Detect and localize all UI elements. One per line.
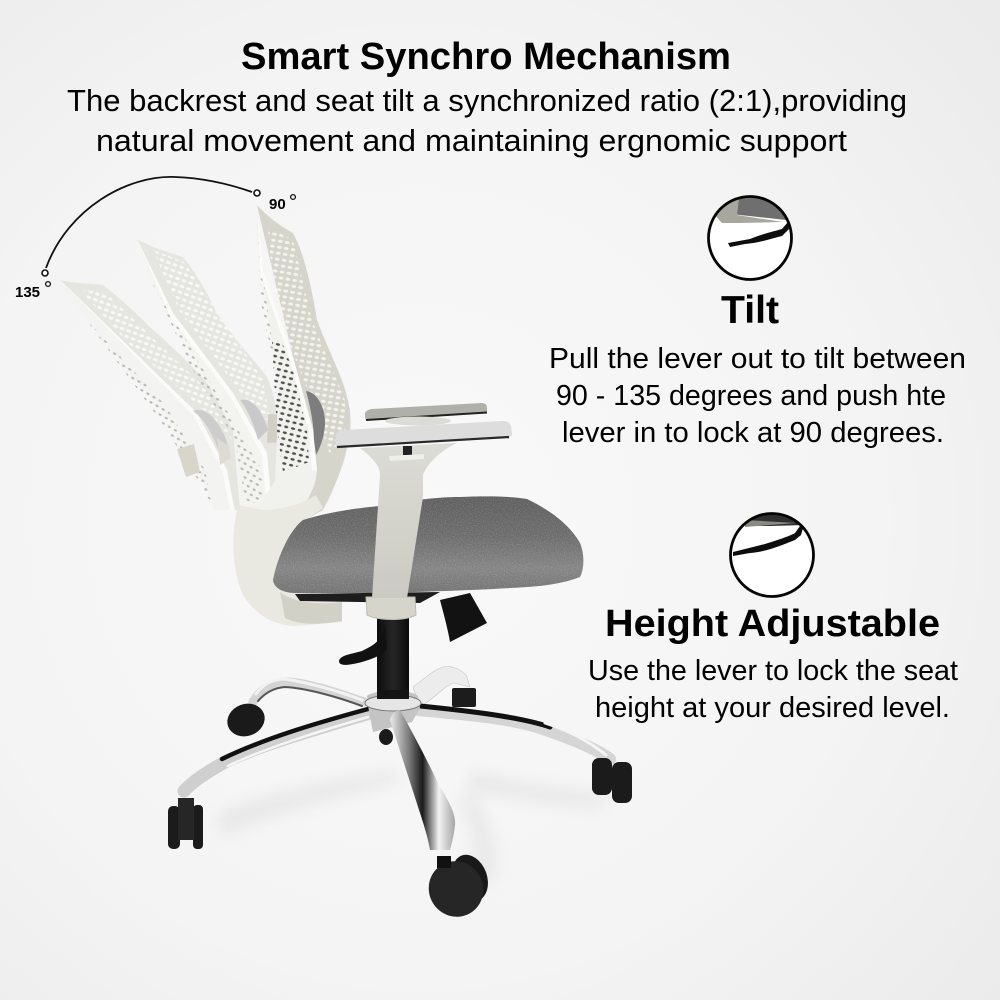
chair <box>60 205 632 927</box>
seat <box>273 496 583 593</box>
armrest front <box>336 421 512 598</box>
knob 135 <box>177 444 200 477</box>
rear-right leg <box>413 667 470 707</box>
rear-right caster <box>452 688 476 707</box>
icon: tilt lever <box>707 195 793 281</box>
backrest: 135 degree position <box>60 280 262 510</box>
knob mid <box>267 414 283 443</box>
description <box>67 83 907 158</box>
height adjustable description <box>588 655 958 724</box>
left leg <box>184 709 370 791</box>
description: natural movement and maintaining ergnomic support <box>96 123 847 158</box>
label: 135 degrees: 135 <box>15 284 40 301</box>
icon: height lever <box>730 510 814 597</box>
heading: height adjustable: Height Adjustable <box>605 603 940 645</box>
title: Smart Synchro Mechanism <box>241 36 731 78</box>
backrest: mid position <box>137 239 284 510</box>
rear-left caster <box>223 698 269 742</box>
label: 135 degrees <box>15 282 50 301</box>
chrome base <box>168 667 632 927</box>
tilt description: lever in to lock at 90 degrees. <box>562 417 944 449</box>
label: 90 degrees: 90 <box>269 196 286 213</box>
tension knob <box>440 593 487 642</box>
left caster <box>168 798 203 849</box>
lumbar pad mid <box>240 400 268 440</box>
lumbar pad 135 <box>193 410 230 462</box>
height adjustable description: Use the lever to lock the seat <box>588 655 958 687</box>
backrest: upright frame and mesh <box>240 205 351 523</box>
right caster <box>592 758 632 803</box>
front leg <box>390 710 455 850</box>
description: The backrest and seat tilt a synchronized ratio (2:1),providing <box>67 83 907 118</box>
lumbar pad upright <box>306 391 325 455</box>
right leg <box>418 706 610 759</box>
tilt description: Pull the lever out to tilt between <box>549 343 966 375</box>
recline angle arc <box>15 177 295 301</box>
heading: tilt: Tilt <box>721 289 779 332</box>
seat bracket <box>366 597 416 620</box>
seat underside <box>295 592 440 603</box>
height lever <box>339 622 387 665</box>
rear-left leg <box>253 679 364 706</box>
label: 90 degrees <box>269 195 295 213</box>
lower frame sweep <box>233 495 342 626</box>
tilt description: 90 - 135 degrees and push hte <box>556 380 946 412</box>
height adjustable description: height at your desired level. <box>595 692 950 724</box>
floor shadows <box>215 770 610 885</box>
gas lift column <box>377 615 409 699</box>
tilt description <box>549 343 966 449</box>
front caster <box>419 850 494 927</box>
hub <box>367 691 420 732</box>
armrest rear <box>365 403 487 426</box>
